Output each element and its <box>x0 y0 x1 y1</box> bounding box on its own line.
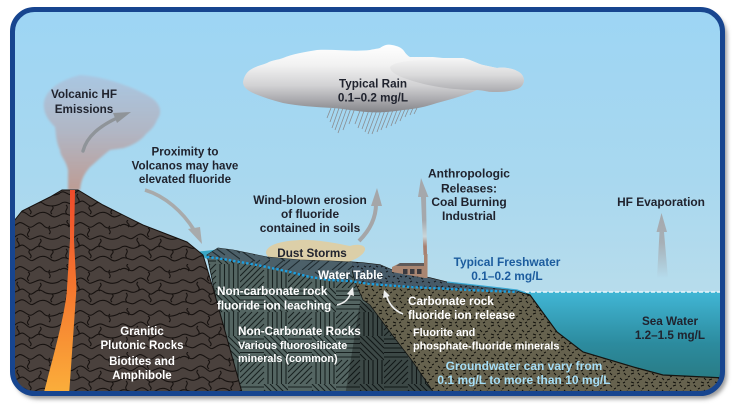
curved arrow: leaching <box>337 287 354 305</box>
sea water <box>526 292 720 378</box>
label: anthropologic releases: Releases: <box>441 182 497 196</box>
cloud body <box>243 45 524 112</box>
label: non-carbonate rocks: Various fluorosilicate <box>238 340 347 352</box>
arrow: proximity to volcanos <box>145 190 202 244</box>
label: anthropologic releases: Coal Burning <box>431 195 507 209</box>
water table <box>207 257 517 292</box>
thin freshwater near volcano <box>200 250 215 260</box>
label: non-carbonate leaching: Non-carbonate rock <box>217 285 327 298</box>
label: non-carbonate rocks: minerals (common) <box>238 353 338 365</box>
label: typical rain: Typical Rain <box>339 78 407 90</box>
label: sea water: 1.2–1.5 mg/L <box>635 329 705 342</box>
arrow: HF evaporation <box>656 213 668 272</box>
rain streaks <box>327 108 417 134</box>
label: volcanic emissions: Emissions <box>55 103 114 116</box>
cloud fold <box>390 58 524 92</box>
label: wind-blown erosion: contained in soils <box>260 221 361 235</box>
label: fluorite minerals: phosphate-fluoride minerals <box>413 340 559 352</box>
label: granitic rocks: Plutonic Rocks <box>100 340 184 352</box>
label: non-carbonate rocks: Non-Carbonate Rocks <box>238 325 361 338</box>
label: HF evaporation: HF Evaporation <box>617 195 705 209</box>
non-carbonate rock <box>207 248 436 396</box>
label: sea water: Sea Water <box>642 315 698 328</box>
volcanic plume <box>44 75 160 190</box>
label: granitic rocks: Granitic <box>120 326 164 338</box>
label: anthropologic releases: Industrial <box>442 209 496 223</box>
label: wind-blown erosion: of fluoride <box>281 207 339 221</box>
label: typical rain: 0.1–0.2 mg/L <box>338 92 408 104</box>
label: anthropologic releases: Anthropologic <box>428 166 510 180</box>
weathered rock layer above water table <box>207 248 352 281</box>
label: granitic rocks: Biotites and <box>109 356 175 368</box>
label: volcanic emissions: Volcanic HF <box>51 88 117 101</box>
arrow: volcanic emissions <box>83 112 131 151</box>
label: carbonate release: fluoride ion release <box>408 309 516 322</box>
label: typical freshwater: 0.1–0.2 mg/L <box>471 269 543 283</box>
sea surface line <box>525 291 722 293</box>
carbonate sediment layer <box>350 261 720 391</box>
rain cloud <box>243 45 524 134</box>
label: proximity to volcanos: elevated fluoride <box>139 173 232 186</box>
label: non-carbonate leaching: fluoride ion leaching <box>217 300 331 312</box>
label: granitic rocks: Amphibole <box>112 370 172 382</box>
label: typical freshwater: Typical Freshwater <box>454 255 560 269</box>
curved arrow: carbonate release <box>383 290 403 314</box>
label: water table: Water Table <box>318 269 383 282</box>
upper sediment above water table <box>350 262 520 292</box>
label: proximity to volcanos: Volcanos may have <box>132 160 239 172</box>
arrow: wind-blown erosion <box>359 188 382 241</box>
label: groundwater: 0.1 mg/L to more than 10 mg/L <box>437 373 611 387</box>
freshwater strip on shore <box>447 282 526 293</box>
label: proximity to volcanos: Proximity to <box>152 146 218 158</box>
label: carbonate release: Carbonate rock <box>408 295 494 308</box>
dark rock shade <box>346 302 432 391</box>
label: dust storms: Dust Storms <box>277 247 347 260</box>
granite volcano <box>10 190 243 396</box>
factory <box>392 254 428 278</box>
dust storm cloud <box>266 240 365 264</box>
lava conduit <box>43 190 76 396</box>
arrow: anthropologic releases <box>418 178 428 255</box>
label: fluorite minerals: Fluorite and <box>413 327 475 339</box>
label: wind-blown erosion: Wind-blown erosion <box>253 193 367 207</box>
label: groundwater: Groundwater can vary from <box>446 359 602 373</box>
